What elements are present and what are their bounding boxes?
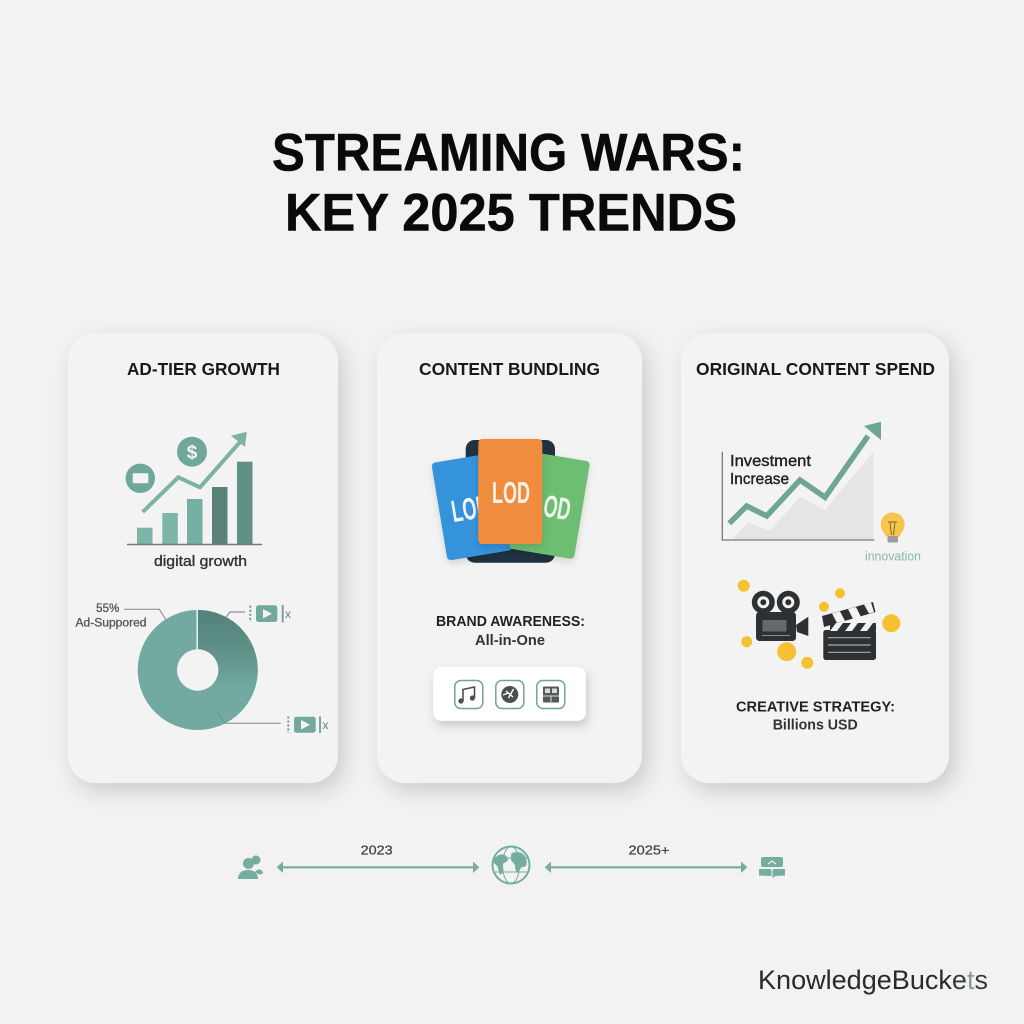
card: dark phone behind <box>466 440 555 563</box>
bar chart: digital growth <box>127 432 262 544</box>
arrow: 2025+ <box>545 862 747 873</box>
card: green: LOD <box>530 486 573 527</box>
donut label: 55% ad-supported: 55% <box>96 603 119 615</box>
timeline <box>238 842 785 884</box>
donut chart <box>138 610 258 730</box>
text: brand awareness: BRAND AWARENESS: <box>436 614 585 630</box>
text: brand awareness <box>436 614 585 649</box>
text: creative strategy <box>736 700 895 733</box>
donut legend: lower video icon <box>218 713 328 733</box>
icons: gold coins <box>738 580 900 669</box>
icon: dollar coin <box>177 437 207 467</box>
donut legend: upper video icon <box>220 605 291 625</box>
donut label: 55% ad-supported <box>76 603 166 630</box>
panel: ad-tier growth <box>68 333 338 783</box>
icon: lightbulb <box>881 512 905 542</box>
text: brand awareness: All-in-One <box>475 633 545 649</box>
card: orange <box>478 439 542 544</box>
icon: dollar coin: $ <box>187 442 198 464</box>
panel: content bundling <box>377 333 642 783</box>
card: green <box>509 451 590 559</box>
card: blue: LOD <box>449 488 492 529</box>
label: 2023: 2023 <box>361 842 393 857</box>
card: orange: LOD <box>492 475 530 510</box>
heading: content bundling: CONTENT BUNDLING <box>419 359 600 379</box>
icon: globe badge <box>496 680 524 708</box>
line chart: investment increase: Investment <box>730 453 812 470</box>
icon: globe <box>492 846 530 884</box>
card: blue <box>431 452 513 561</box>
arrow: 2023 <box>277 862 479 873</box>
heading: ad-tier growth: AD-TIER GROWTH <box>127 359 280 379</box>
panel: original content spend <box>681 333 949 783</box>
line chart: investment increase: Increase <box>730 471 789 488</box>
watermark: KnowledgeBuckets: KnowledgeBuckets <box>758 965 988 995</box>
donut legend: lower video icon: x <box>322 718 328 732</box>
app tray <box>433 667 586 721</box>
icon: grid <box>537 680 565 708</box>
app cards bundle <box>431 439 590 563</box>
icon: clapperboard <box>822 602 876 660</box>
donut label: 55% ad-supported: Ad-Suppored <box>76 618 146 630</box>
text: creative strategy: Billions USD <box>773 717 858 733</box>
heading: original content spend: ORIGINAL CONTENT SPEND <box>696 359 935 379</box>
icon: music <box>455 680 483 708</box>
label: innovation: innovation <box>865 550 921 564</box>
text: creative strategy: CREATIVE STRATEGY: <box>736 700 895 716</box>
label: digital growth: digital growth <box>154 554 247 570</box>
icon: ad screen <box>126 464 155 493</box>
line chart: investment increase <box>722 422 881 540</box>
icon: audience <box>238 856 263 879</box>
donut legend: upper video icon: x <box>285 607 291 621</box>
label: 2025+: 2025+ <box>628 842 670 857</box>
title: STREAMING WARS: <box>272 124 745 182</box>
icon: film camera <box>752 591 808 641</box>
title <box>272 124 745 242</box>
icon: reader <box>759 857 785 878</box>
title: KEY 2025 TRENDS <box>285 184 737 242</box>
